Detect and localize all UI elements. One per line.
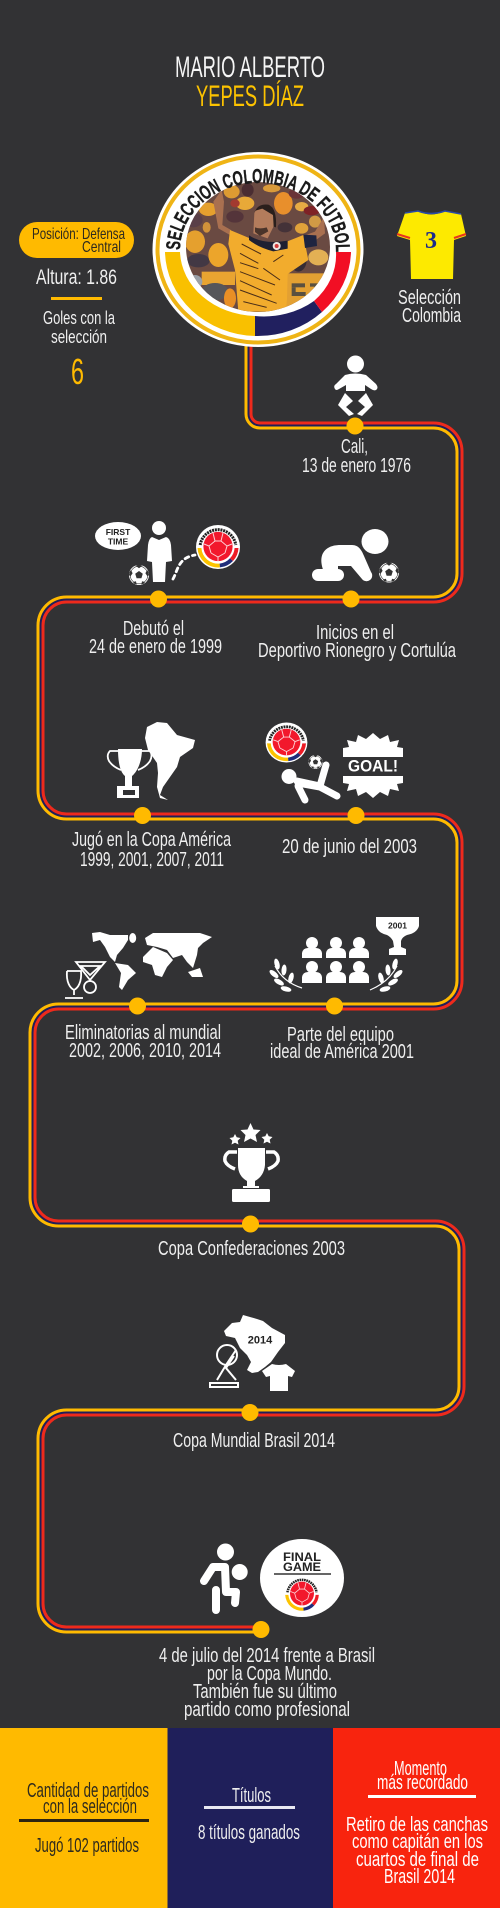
text: qualifiers: Eliminatorias al mundial <box>65 1022 221 1044</box>
team label: Selección <box>398 287 461 309</box>
jersey icon: 3 <box>425 228 437 254</box>
icon: crawling baby <box>312 529 399 582</box>
icon: world map and medals <box>65 932 212 998</box>
goals number: 6 <box>71 351 84 392</box>
title: MARIO ALBERTO <box>175 51 325 84</box>
text: Copa America: 1999, 2001, 2007, 2011 <box>80 849 224 871</box>
icon: debut <box>95 521 240 585</box>
raised arms <box>213 190 231 235</box>
icon: trophy and South America <box>108 722 195 800</box>
player <box>282 765 337 800</box>
timeline ribbon: yellow, blue and red path <box>30 345 464 1632</box>
title: YEPES DÍAZ <box>196 80 304 113</box>
world cup trophy <box>210 1345 238 1387</box>
goals label <box>43 297 116 347</box>
icon: trophy with stars <box>225 1123 278 1202</box>
photo of the player <box>186 182 330 312</box>
jersey stripes <box>240 244 283 307</box>
ring segments <box>165 252 351 336</box>
South America map <box>145 722 195 800</box>
speech bubble: FIRST <box>106 527 131 537</box>
icon: bicycle kick and goal <box>266 722 403 800</box>
icon: final game badge: FINAL <box>283 1552 321 1564</box>
text: last match: por la Copa Mundo. <box>207 1663 332 1685</box>
panel: most remembered moment <box>333 1728 500 1908</box>
text: beginnings <box>258 622 457 662</box>
speech bubble: TIME <box>108 536 128 546</box>
text: birth: Cali, <box>341 436 368 458</box>
ball <box>308 755 322 769</box>
ball <box>129 565 149 585</box>
icon: baby <box>334 356 378 416</box>
laurels <box>268 958 404 993</box>
dashed trajectory <box>173 555 195 579</box>
text: debut date: 24 de enero de 1999 <box>89 636 222 658</box>
trophy 2001: 2001 <box>388 920 407 930</box>
position pill: Central <box>82 239 121 256</box>
Brazil map: 2014 <box>248 1334 273 1346</box>
panel: matches: Cantidad de partidos <box>27 1780 149 1802</box>
goal badge: GOAL! <box>348 758 398 776</box>
panel: most remembered moment: Momento <box>394 1758 447 1780</box>
panel: titles: 8 títulos ganados <box>198 1822 300 1844</box>
panel: most remembered moment: Brasil 2014 <box>384 1866 455 1888</box>
crest <box>266 722 307 763</box>
text: Copa America: Jugó en la Copa América <box>72 829 232 851</box>
title <box>175 51 325 113</box>
goals label: Goles con la <box>43 308 116 328</box>
team label <box>398 287 462 327</box>
text: Confederations Cup: Copa Confederaciones 2003 <box>158 1238 345 1260</box>
panel: matches: con la selección <box>43 1796 137 1818</box>
team label: Colombia <box>402 305 462 327</box>
icon: Brazil 2014 <box>210 1315 295 1391</box>
trophy 2001 <box>376 917 419 955</box>
text: last match: partido como profesional <box>184 1699 350 1721</box>
panel: matches <box>0 1728 168 1908</box>
panel: titles <box>168 1728 334 1908</box>
icon: final game badge <box>260 1539 344 1617</box>
text: ideal team <box>270 1024 414 1063</box>
text: 20 June 2003: 20 de junio del 2003 <box>282 836 417 858</box>
person <box>147 521 172 582</box>
text: Copa America <box>72 829 232 871</box>
text: birth <box>302 436 411 477</box>
world map <box>92 932 212 990</box>
text: debut date: Debutó el <box>123 618 184 640</box>
height: Altura: 1.86 <box>36 266 117 289</box>
text: World Cup: Copa Mundial Brasil 2014 <box>173 1430 335 1452</box>
goals label: selección <box>51 327 107 347</box>
position pill <box>19 222 134 258</box>
text: beginnings: Inicios en el <box>316 622 394 644</box>
text: ideal team: ideal de América 2001 <box>270 1041 414 1063</box>
icon: final game badge: GAME <box>283 1562 321 1574</box>
text: ideal team: Parte del equipo <box>287 1024 394 1046</box>
head <box>253 206 274 238</box>
players <box>302 937 369 983</box>
jersey <box>228 230 308 312</box>
text: last match <box>159 1645 375 1721</box>
jersey icon <box>397 211 466 279</box>
icon: ideal team <box>268 917 419 993</box>
position pill: Posición: Defensa <box>32 226 125 243</box>
text: last match: 4 de julio del 2014 frente a Brasil <box>159 1645 375 1667</box>
panel: matches: Jugó 102 partidos <box>35 1835 139 1857</box>
text: qualifiers: 2002, 2006, 2010, 2014 <box>69 1040 221 1062</box>
curved team name: SELECCION COLOMBIA DE FUTBOL <box>166 168 350 252</box>
crest <box>196 525 240 569</box>
icon: juggling player <box>204 1544 248 1610</box>
medallion <box>152 152 364 347</box>
text: last match: También fue su último <box>193 1681 337 1703</box>
medals <box>65 962 105 998</box>
panel: titles: Títulos <box>232 1785 271 1807</box>
text: debut date <box>89 618 222 658</box>
timeline markers <box>129 418 364 1638</box>
shirt <box>262 1364 295 1391</box>
trophy <box>108 749 152 798</box>
speech bubble <box>95 522 141 550</box>
left stats column <box>19 222 134 392</box>
text: qualifiers <box>65 1022 221 1062</box>
text: birth: 13 de enero 1976 <box>302 455 411 477</box>
